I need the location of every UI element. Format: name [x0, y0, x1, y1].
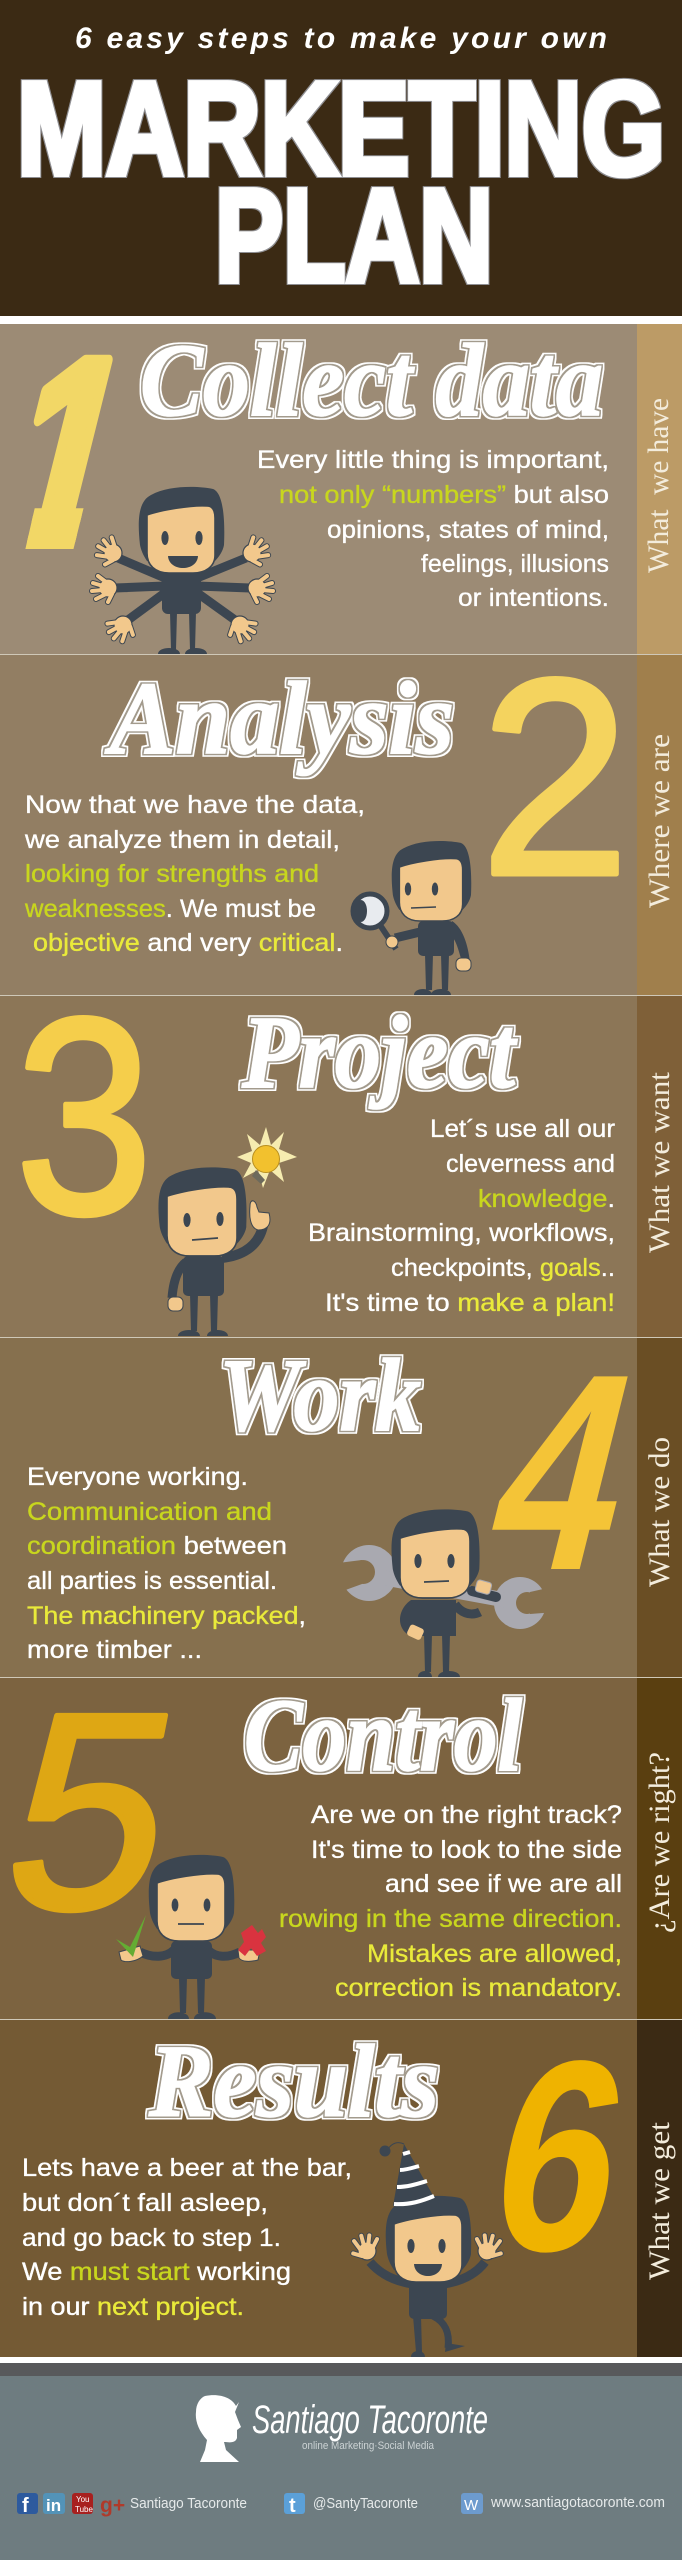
icon: party hat [380, 2143, 435, 2207]
logo name: Santiago Tacoronte [252, 2398, 488, 2442]
character: many arms [92, 487, 273, 654]
text: project body: Let´s use all our [430, 1115, 615, 1143]
text: project body [308, 1115, 615, 1317]
side label: are we right: ¿Are we right? [643, 1752, 676, 1933]
text: analysis body [24, 791, 365, 957]
side label: where we are: Where we are [643, 734, 676, 908]
text: project body: cleverness and [446, 1150, 615, 1178]
text: analysis body: weaknesses. We must be [24, 895, 316, 923]
text: project body: checkpoints, goals.. [391, 1254, 615, 1282]
text: collect data body: Every little thing is important, [257, 446, 609, 474]
contact: name: Santiago Tacoronte [130, 2495, 247, 2512]
icon: linkedin: in [46, 2496, 61, 2515]
header panel [0, 0, 682, 324]
icon: youtube: You [76, 2495, 90, 2504]
icon: red cross [238, 1925, 266, 1956]
side label: what we have: What we have [642, 398, 675, 573]
character: magnifying glass [353, 841, 471, 995]
icon: silhouette [196, 2395, 241, 2462]
text: results body [22, 2154, 352, 2321]
heading: control: Control [244, 1678, 522, 1793]
text: collect data body: or intentions. [458, 584, 609, 612]
text: project body: knowledge . [478, 1185, 615, 1213]
heading: results: Results [148, 2024, 439, 2139]
number 3: 3 [15, 961, 153, 1273]
text: project body: It's time to make a plan! [325, 1289, 615, 1317]
text: work body: Communication and [27, 1498, 272, 1526]
panel: step 5 control [0, 1654, 682, 2019]
text: control body: Are we on the right track? [311, 1801, 622, 1829]
tagline: 6 easy steps to make your own [75, 22, 607, 55]
title: plan: PLAN [215, 162, 493, 309]
text: results body: in our next project. [22, 2293, 244, 2321]
side label: what we do: What we do [643, 1437, 676, 1587]
text: project body: Brainstorming, workflows, [308, 1219, 615, 1247]
side label: what we want: What we want [643, 1071, 676, 1253]
contact: twitter handle: @SantyTacoronte [313, 2495, 418, 2512]
text: analysis body: we analyze them in detail, [24, 826, 340, 854]
text: control body: correction is mandatory. [335, 1974, 622, 2002]
panel: step 4 work [0, 1317, 682, 1677]
icon: linkedin [43, 2493, 65, 2515]
text: work body: Everyone working. [27, 1463, 248, 1491]
icon: wordpress [461, 2493, 483, 2514]
character: idea [158, 1167, 270, 1336]
panel: step 3 project [0, 961, 682, 1337]
text: results body: but don´t fall asleep, [22, 2189, 268, 2217]
heading: work: Work [219, 1338, 421, 1453]
icon: light bulb [237, 1127, 297, 1188]
text: work body [27, 1463, 306, 1664]
icon: google plus: g+ [100, 2494, 125, 2517]
text: analysis body: objective and very critical. [33, 929, 343, 957]
text: control body: rowing in the same direction. [279, 1905, 622, 1933]
icon: youtube [72, 2493, 93, 2514]
icon: twitter [284, 2493, 305, 2517]
panel: step 1 collect data [0, 306, 682, 655]
heading: analysis: Analysis [104, 661, 454, 776]
text: control body: Mistakes are allowed, [367, 1940, 622, 1968]
text: results body: and go back to step 1. [22, 2224, 281, 2252]
text: work body: coordination between [27, 1532, 287, 1560]
text: analysis body: Now that we have the data, [25, 791, 365, 819]
text: collect data body: opinions, states of mind, [327, 516, 609, 544]
side label: what we get: What we get [643, 2121, 676, 2280]
text: analysis body: looking for strengths and [25, 860, 319, 888]
text: work body: more timber ... [27, 1636, 202, 1664]
icon: facebook: f [22, 2495, 29, 2517]
icon: magnifier [353, 894, 396, 949]
heading: project: Project [241, 995, 518, 1110]
panel separators [0, 654, 682, 2020]
text: results body: We must start working [22, 2258, 291, 2286]
text: collect data body: not only “numbers” but also [279, 481, 609, 509]
icon: wordpress: W [464, 2497, 479, 2514]
number 6: 6 [474, 2005, 647, 2309]
icon: twitter: t [289, 2495, 296, 2517]
text: control body: It's time to look to the side [311, 1836, 622, 1864]
logo tagline: online Marketing·Social Media [302, 2440, 435, 2452]
text: control body: and see if we are all [385, 1870, 622, 1898]
footer panel [0, 2357, 682, 2560]
text: results body: Lets have a beer at the bar, [22, 2154, 352, 2182]
icon: youtube: Tube [75, 2505, 93, 2514]
character: check and cross [116, 1855, 266, 2019]
icon: facebook [17, 2493, 38, 2517]
icon: green check [116, 1915, 146, 1957]
text: collect data body: feelings, illusions [421, 550, 609, 578]
icon: wrench [328, 1545, 556, 1629]
panel: step 2 analysis [0, 622, 682, 995]
character: worker [391, 1509, 492, 1677]
heading: collect data: Collect data [140, 323, 603, 438]
contact: website: www.santiagotacoronte.com [490, 2494, 665, 2511]
panel: step 6 results [0, 2005, 682, 2357]
character: party [350, 2143, 504, 2357]
text: work body: The machinery packed , [27, 1602, 306, 1630]
text: work body: all parties is essential. [27, 1567, 277, 1595]
text: control body [279, 1801, 622, 2002]
text: collect data body [257, 446, 609, 612]
number 2: 2 [480, 622, 630, 934]
